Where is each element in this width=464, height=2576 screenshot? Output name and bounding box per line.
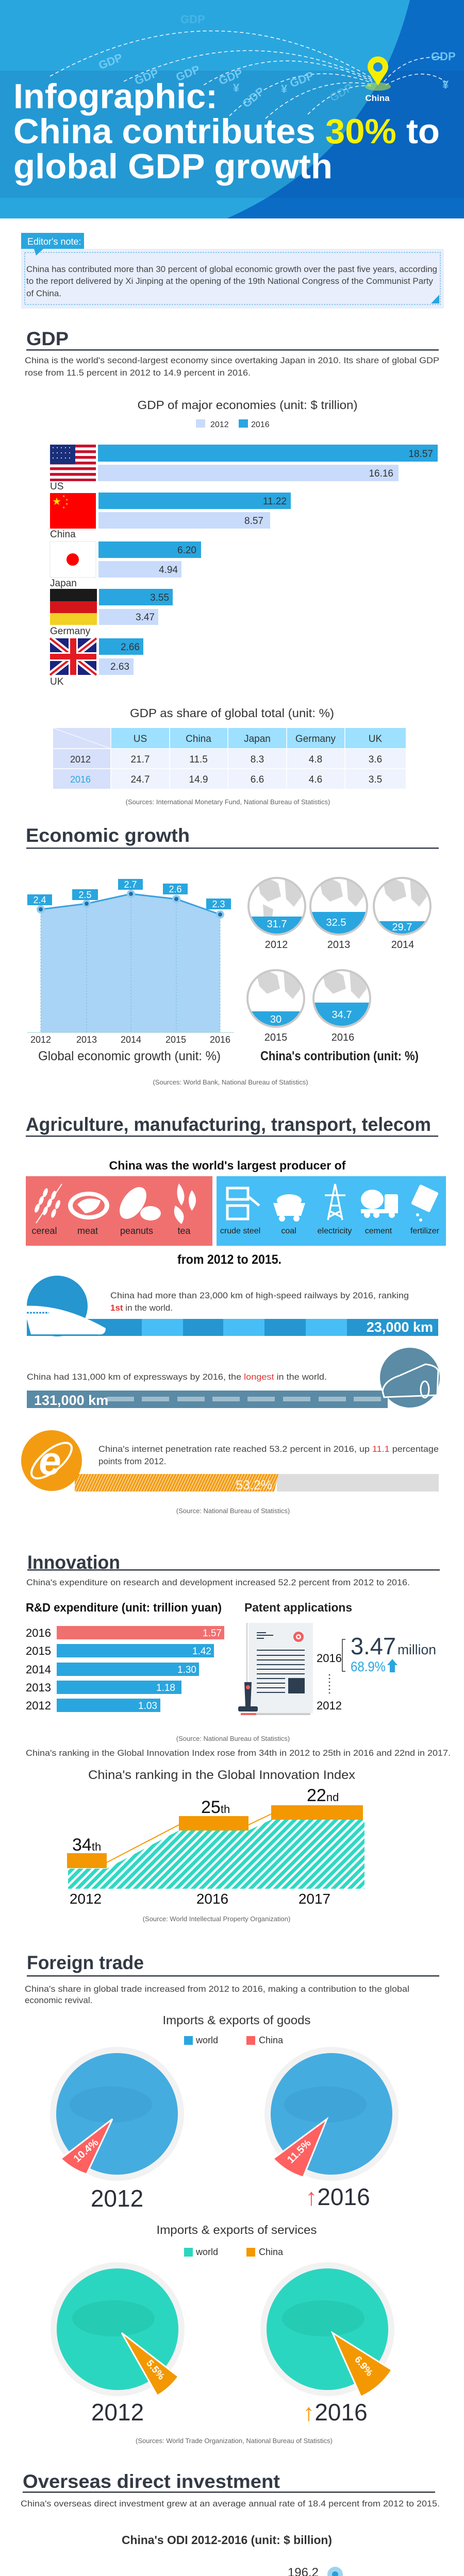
panel: patent applications: 3.47 [351,1633,396,1659]
bar chart: GDP of major economies: Japan [50,578,77,589]
panel: agriculture products [26,1176,212,1246]
table: GDP share of global total: 21.7 [131,754,150,765]
header banner: GDP [133,66,160,88]
icon: crude steel [227,1188,259,1219]
pie: services 2012: 5.5% [144,2358,167,2382]
icon: China flag [50,493,96,529]
table: GDP share of global total: 2016 [70,774,91,785]
icon: coal [273,1194,305,1222]
header banner: GDP [431,50,456,63]
bar chart: R&D expenditure: 2016 [26,1626,51,1639]
bar-line chart: China's ODI [21,2533,434,2576]
text: ranking paragraph: China's ranking in the Global Innovation Index rose from 34th in 2012 to 25th in 2016 and 22nd in 2017. [26,1748,451,1758]
bar chart: GDP of major economies: US [50,481,63,492]
panel: high-speed railway: 23,000 km [367,1319,433,1335]
header banner: GDP [240,84,267,110]
bar chart: R&D expenditure: 1.30 [177,1665,196,1675]
header banner [0,0,464,218]
table: GDP share of global total: 8.3 [251,754,264,765]
chart: Global Innovation Index ranking: 25th [201,1798,230,1817]
panel: patent applications: 68.9% [351,1659,386,1674]
icon: bullet train [23,1306,106,1334]
pie: services 2012 [51,2262,185,2396]
table: GDP share of global total [53,706,406,789]
globes: China's contribution: China's contribution (unit: %) [260,1049,419,1063]
header banner: GDP [180,13,205,26]
panel: patent applications: 2016 [317,1652,342,1665]
icon: China map pin: China [365,93,390,103]
icon: internet e [26,1437,77,1484]
icon: cement [361,1190,398,1218]
bar chart: GDP of major economies: GDP of major economies (unit: $ trillion) [137,398,358,412]
bar chart: GDP of major economies: 2.63 [110,662,129,672]
pie: services 2016 [260,2262,394,2397]
header banner: ¥ [442,78,449,91]
icon: patent document [238,1623,313,1715]
icon: China map pin [365,56,391,103]
heading: Economic growth: Economic growth [26,825,190,846]
bar-line chart: China's ODI: China's ODI 2012-2016 (unit: $ billion) [122,2533,332,2547]
panel: agriculture products: tea [177,1226,191,1236]
header banner: GDP [97,51,124,72]
line chart: global economic growth: 2.3 [212,899,225,909]
pie charts: imports & exports of services [51,2223,394,2426]
bar chart: GDP of major economies: China [50,529,76,540]
table: GDP share of global total: Japan [244,734,271,744]
heading: Foreign trade: Foreign trade [27,1952,144,1973]
pie charts: imports & exports of goods: China [259,2035,284,2045]
panel: agriculture products: meat [77,1226,98,1236]
text: GDP paragraph: rose from 11.5 percent in 2012 to 14.9 percent in 2016. [25,368,251,378]
source: WIPO: (Source: World Intellectual Property Organization) [143,1915,290,1923]
header banner: GDP [217,66,244,88]
table: GDP share of global total: Germany [295,734,336,744]
icon: China flag: ★ [65,502,68,506]
line chart: global economic growth: Global economic growth (unit: %) [38,1049,221,1063]
icon: peanuts [114,1182,161,1224]
pie: goods 2016 [264,2047,399,2181]
panel: agriculture products: cereal [31,1226,57,1236]
table: GDP share of global total: 4.6 [309,774,322,785]
bar chart: GDP of major economies: 8.57 [244,516,263,527]
table: GDP share of global total: GDP as share of global total (unit: %) [130,706,334,720]
table: GDP share of global total: 6.6 [251,774,264,785]
bar chart: R&D expenditure: 1.03 [138,1701,157,1711]
bar chart: R&D expenditure: R&D expenditure (unit: trillion yuan) [26,1601,222,1614]
globes: China's contribution: 2012 [265,939,288,951]
icon: electricity [325,1184,345,1220]
pie charts: imports & exports of goods: 2012 [91,2185,143,2212]
panel: expressways: 131,000 km [34,1393,108,1408]
title: global GDP growth [13,147,333,186]
text: GDP paragraph: China is the world's second-largest economy since overtaking Japan in 2010. Its share of global GDP [25,355,439,365]
table: GDP share of global total: 24.7 [131,774,150,785]
pie charts: imports & exports of services: Imports & exports of services [157,2223,317,2236]
bar chart: GDP of major economies: 4.94 [159,565,178,575]
chart: Global Innovation Index ranking: 34th [72,1835,101,1855]
text: foreign trade paragraph: economic revival. [25,1995,92,2005]
panel: industrial products: electricity [318,1227,352,1235]
panel: industrial products: cement [365,1227,392,1235]
chart: Global Innovation Index ranking: 22nd [307,1786,339,1805]
icon: Germany flag [50,589,97,625]
heading: Innovation: Innovation [27,1552,120,1573]
pie charts: imports & exports of services: ↑2016 [303,2399,368,2426]
icon: China flag: ★ [62,506,65,510]
icon: meat [68,1192,109,1219]
heading: Agriculture, manufacturing, transport, telecom: Agriculture, manufacturing, transport, telecom [26,1114,431,1135]
panel: internet penetration: points from 2012. [98,1456,166,1466]
bar chart: GDP of major economies: 3.47 [136,612,155,623]
panel: internet penetration: 53.2% [236,1478,272,1493]
line chart: global economic growth: 2.5 [78,890,92,900]
line chart: global economic growth: 2012 [30,1035,51,1045]
globes: China's contribution: 30 [270,1014,281,1025]
editor's note: of China. [26,289,61,298]
title [13,77,440,186]
panel: internet penetration: China's internet penetration rate reached 53.2 percent in 2016, up 11.1 percentage [98,1444,439,1454]
globes: China's contribution: 2014 [391,939,414,951]
line chart: global economic growth: 2014 [121,1035,141,1045]
heading: Overseas direct investment: Overseas direct investment [23,2471,280,2492]
table: GDP share of global total: 4.8 [309,754,322,765]
globes: China's contribution: 2016 [332,1032,354,1043]
pie: goods 2012: 10.4% [72,2137,101,2165]
header banner: GDP [174,63,202,84]
bar chart: R&D expenditure [26,1601,224,1712]
chart: Global Innovation Index ranking: China's ranking in the Global Innovation Index [88,1768,355,1782]
pie charts: imports & exports of goods [50,2013,399,2212]
icon: China flag: ★ [62,495,65,498]
icon: China flag: ★ [52,496,61,507]
icon: UK flag [50,638,96,675]
line chart: global economic growth: 2.7 [124,879,137,890]
bar chart: GDP of major economies: 3.55 [150,592,169,603]
table: GDP share of global total: 3.5 [369,774,382,785]
icon: cereal [34,1184,62,1223]
pie charts: imports & exports of goods: ↑2016 [305,2183,370,2210]
heading: GDP: GDP [26,328,69,349]
text: foreign trade paragraph: China's share in global trade increased from 2012 to 2016, making a contribution to the global [25,1984,409,1994]
pie: goods 2012 [50,2047,184,2181]
chart: Global Innovation Index ranking: 2016 [196,1891,228,1907]
pie charts: imports & exports of services: world [195,2247,218,2257]
panel: patent applications: 2012 [317,1699,342,1712]
globes: China's contribution: 2013 [327,939,350,951]
chart: Global Innovation Index ranking: 2017 [299,1891,330,1907]
bar chart: R&D expenditure: 1.18 [156,1683,175,1693]
header banner: ¥ [281,82,288,95]
panel: expressways [27,1348,440,1408]
bar chart: R&D expenditure: 1.57 [203,1628,222,1639]
header banner: ¥ [233,81,240,94]
table: GDP share of global total: China [186,734,211,744]
pie charts: imports & exports of goods: Imports & exports of goods [163,2013,310,2027]
line chart: global economic growth: 2013 [76,1035,97,1045]
panel: expressways: China had 131,000 km of expressways by 2016, the longest in the world. [27,1372,327,1382]
source: GDP: (Sources: International Monetary Fund, National Bureau of Statistics) [126,798,330,806]
bar chart: R&D expenditure: 1.42 [192,1646,211,1657]
text: from 2012 to 2015: from 2012 to 2015. [177,1252,281,1267]
line chart: global economic growth: 2016 [210,1035,230,1045]
header banner: GDP [288,69,316,90]
title: Infographic: [13,77,218,116]
globes: China's contribution: 29.7 [392,922,412,933]
editor's note: China has contributed more than 30 percent of global economic growth over the past five years, according [26,264,437,274]
table: GDP share of global total: 3.6 [369,754,382,765]
editor's note: Editor's note: [27,236,81,247]
bar chart: GDP of major economies: 16.16 [369,468,393,479]
icon: China flag: ★ [65,498,68,502]
panel: patent applications: million [397,1642,436,1657]
header banner: GDP [327,81,355,104]
globes: China's contribution: 2015 [264,1032,287,1043]
source: trade: (Sources: World Trade Organization, National Bureau of Statistics) [136,2437,333,2445]
globes: China's contribution: 31.7 [267,919,287,930]
panel: industrial products: coal [281,1227,296,1235]
line chart: global economic growth: 2.4 [33,895,46,905]
bar chart: R&D expenditure: 2014 [26,1663,51,1676]
bar chart: GDP of major economies: 2012 [210,420,229,429]
panel: industrial products: fertilizer [410,1227,440,1235]
source: economic growth: (Sources: World Bank, National Bureau of Statistics) [153,1078,308,1086]
panel: patent applications: Patent applications [244,1601,352,1614]
table: GDP share of global total: US [134,734,147,744]
pie charts: imports & exports of services: 2012 [91,2399,144,2426]
globes: China's contribution: 32.5 [326,917,346,928]
editor's note: to the report delivered by Xi Jinping at the opening of the 19th National Congress of the Communist Party [26,276,433,286]
pie: goods 2016: 11.5% [285,2138,313,2166]
icon: fertilizer [411,1184,439,1222]
panel: agriculture products: peanuts [120,1226,153,1236]
bar chart: GDP of major economies: 11.22 [263,496,287,507]
globes: China's contribution [242,878,438,1063]
editor's note [21,233,444,309]
text: largest producer heading: China was the world's largest producer of [109,1159,346,1172]
title: China contributes 30% to [13,112,440,151]
bar chart: R&D expenditure: 2013 [26,1681,51,1694]
source: transport: (Source: National Bureau of Statistics) [176,1507,290,1515]
panel: industrial products: crude steel [220,1227,260,1235]
text: innovation paragraph: China's expenditure on research and development increased 52.2 percent from 2012 to 2016. [26,1578,410,1587]
chart: Global Innovation Index ranking: 2012 [70,1891,102,1907]
text: ODI paragraph: China's overseas direct investment grew at an average annual rate of 18.4 percent from 2012 to 2015. [21,2499,440,2509]
pie charts: imports & exports of goods: world [195,2035,218,2045]
pie: services 2016: 6.9% [352,2354,375,2378]
table: GDP share of global total: 2012 [70,754,91,765]
line chart: global economic growth: 2015 [165,1035,186,1045]
icon: internet e: e [39,1438,61,1483]
bar chart: GDP of major economies [50,398,438,687]
table: GDP share of global total: 11.5 [189,754,208,765]
source: R&D: (Source: National Bureau of Statistics) [176,1735,290,1742]
icon: US flag [50,445,96,481]
bar chart: GDP of major economies: Germany [50,626,91,637]
bar chart: GDP of major economies: 6.20 [177,545,196,556]
pie charts: imports & exports of services: China [259,2247,284,2257]
panel: patent applications [238,1601,436,1715]
line chart: global economic growth: 2.6 [169,884,182,894]
bar chart: GDP of major economies: 18.57 [408,449,433,460]
panel: high-speed railway [23,1276,438,1336]
bar chart: R&D expenditure: 2012 [26,1699,51,1712]
table: GDP share of global total: 14.9 [189,774,208,785]
text: foreign trade paragraph [25,1984,409,2005]
text: GDP paragraph [25,355,439,378]
chart: Global Innovation Index ranking [67,1768,364,1907]
bar chart: GDP of major economies: 2.66 [121,642,140,653]
panel: high-speed railway: China had more than 23,000 km of high-speed railways by 2016, ranking [110,1291,409,1300]
bar chart: GDP of major economies: 2016 [251,420,270,429]
icon: car [383,1364,438,1398]
bar chart: GDP of major economies: UK [50,676,64,687]
table: GDP share of global total: UK [369,734,383,744]
icon: Japan flag [50,541,96,578]
bar chart: R&D expenditure: 2015 [26,1645,51,1657]
panel: internet penetration [21,1430,439,1493]
icon: tea [174,1183,196,1224]
panel: high-speed railway: 1st in the world. [110,1303,173,1313]
panel: industrial products [217,1176,446,1246]
line chart: global economic growth [27,879,234,1063]
globes: China's contribution: 34.7 [332,1009,352,1021]
